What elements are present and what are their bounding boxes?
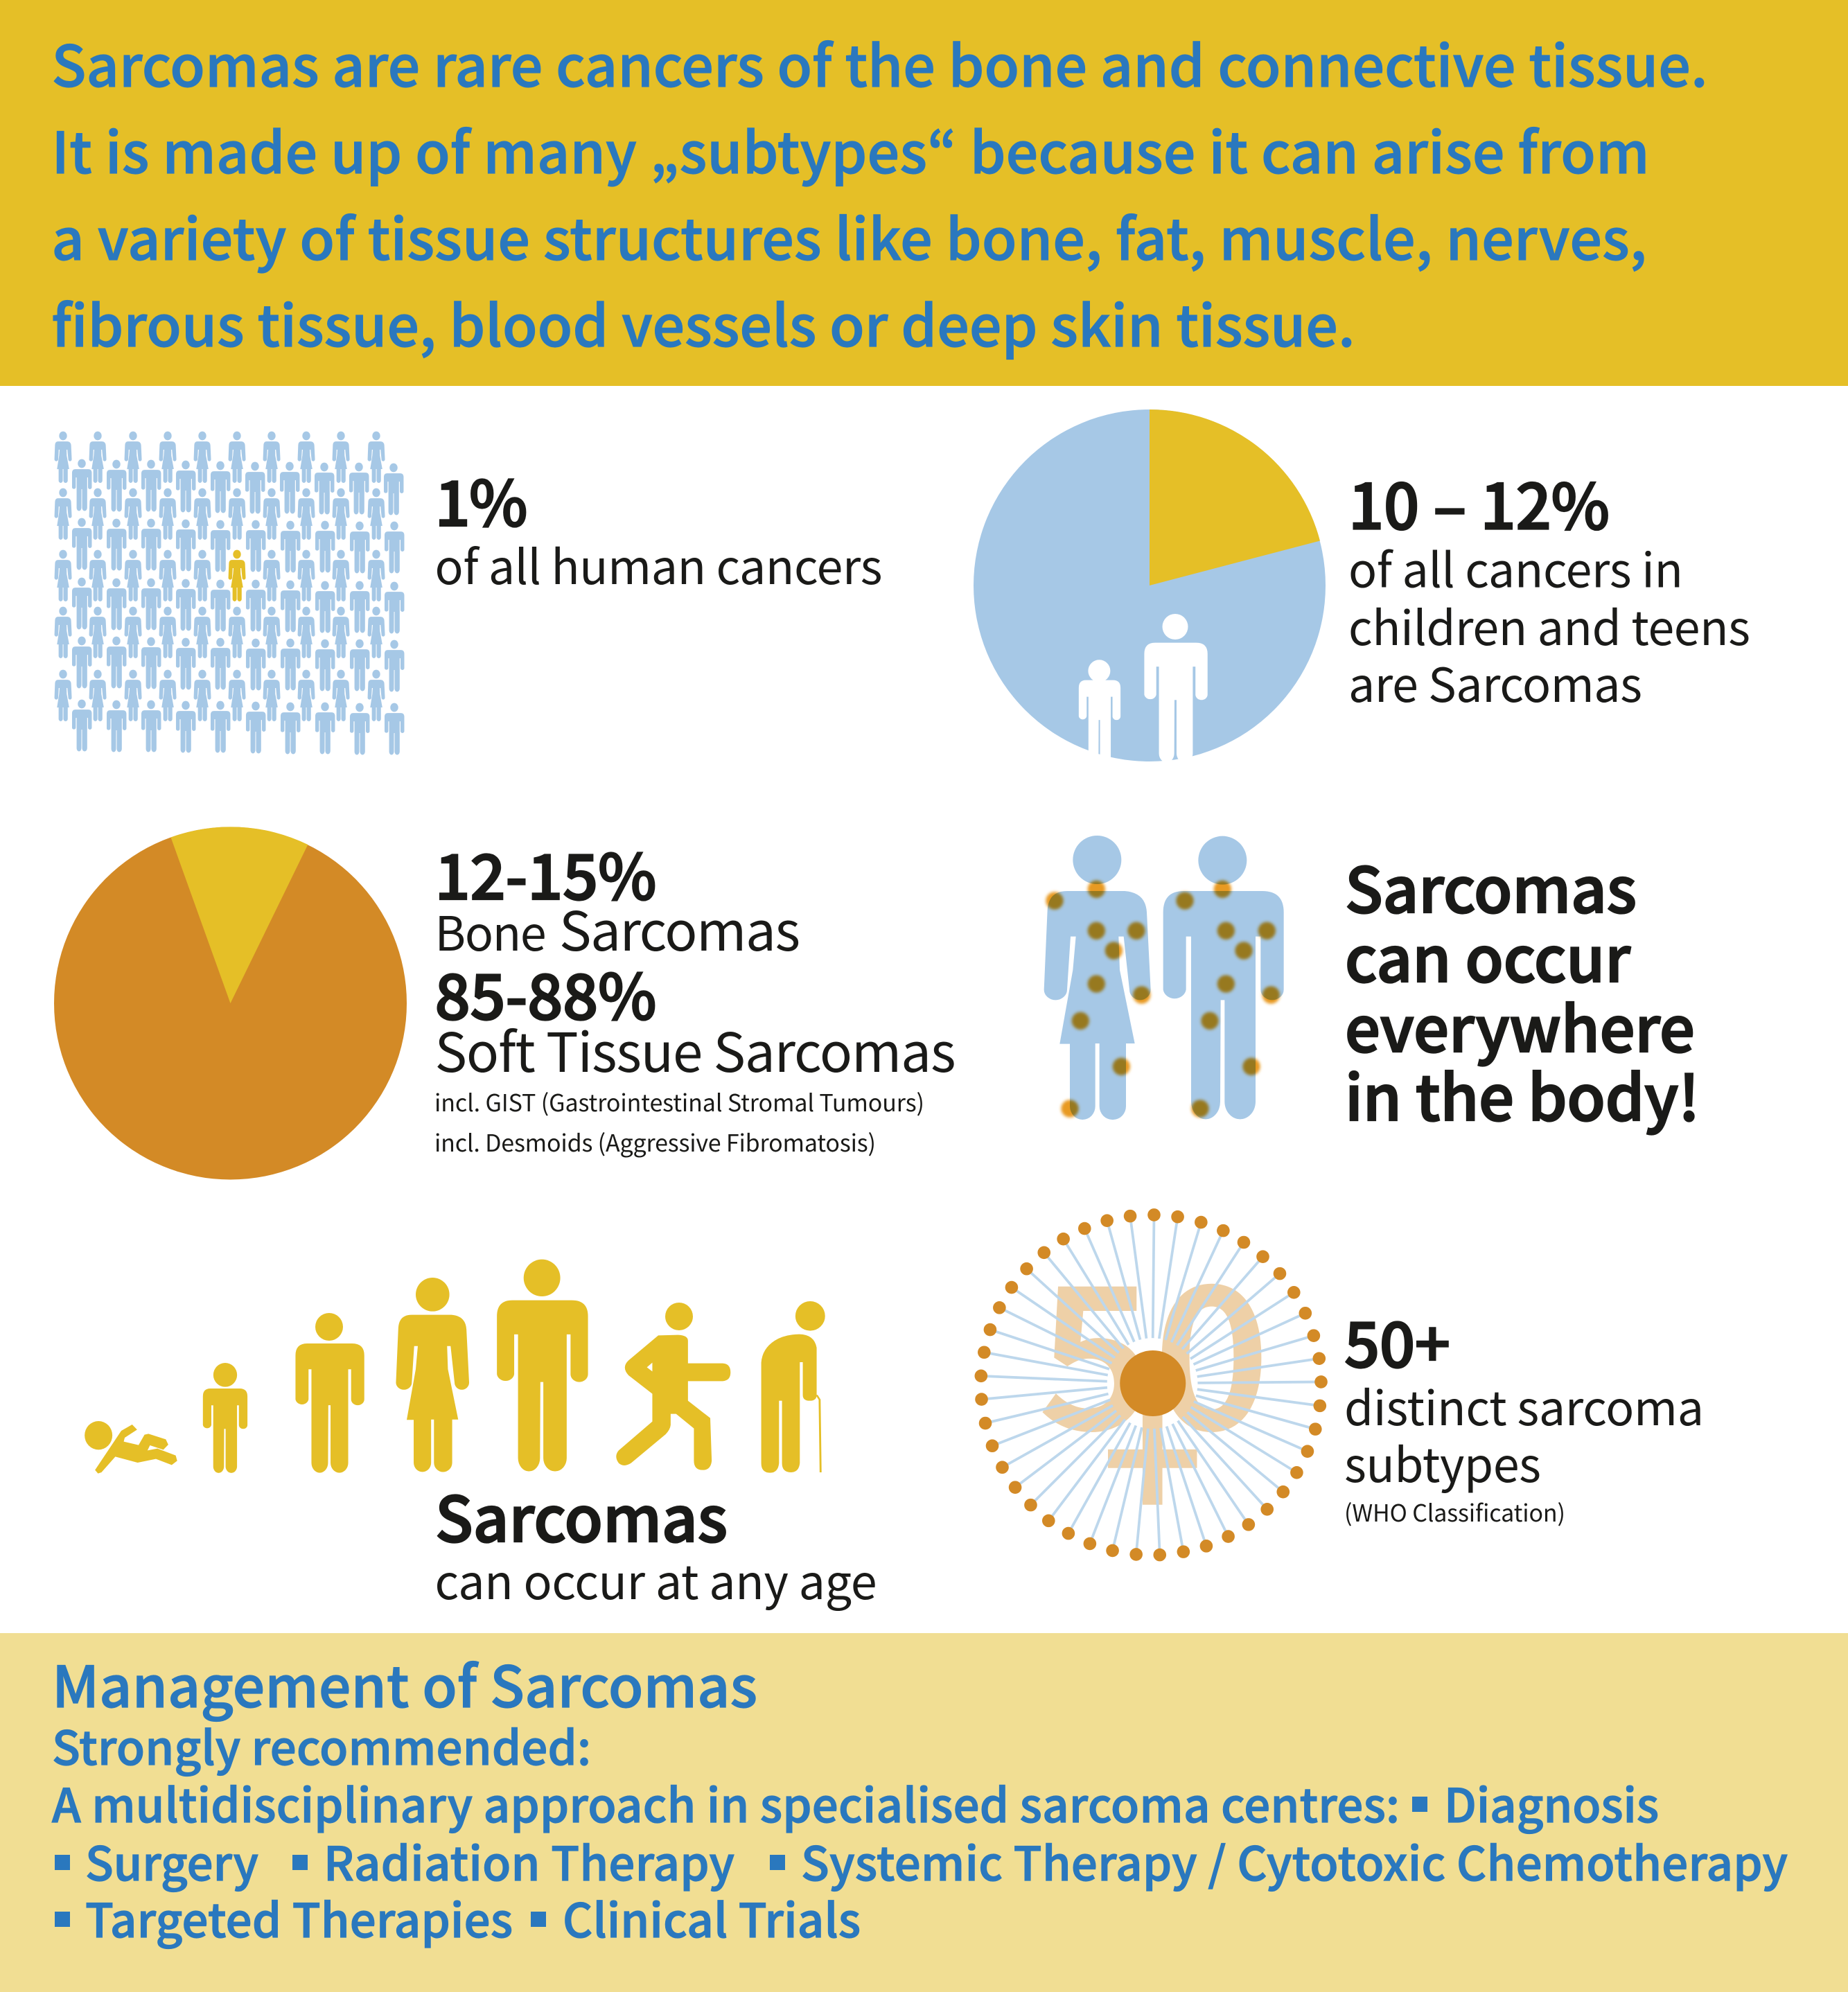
stat: 1%: [435, 454, 883, 598]
large 50: 50: [1037, 1200, 1270, 1487]
header text: [51, 21, 1707, 363]
stat: any age: Sarcomas: [435, 1470, 728, 1560]
stat: sarcoma types: incl. Desmoids (Aggressive Fibromatosis): [434, 1125, 876, 1158]
icon: baby: [85, 1421, 177, 1474]
icon: elderly person with cane: [762, 1301, 825, 1473]
stat: sarcoma types: Bone: [435, 896, 546, 964]
stat: 10-12%: of all cancers in: [1348, 532, 1683, 601]
callout: everywhere in the body: everywhere: [1345, 980, 1695, 1070]
management text: Surgery: [85, 1827, 258, 1894]
subtypes starburst: [981, 1200, 1321, 1555]
icon: teen: [295, 1313, 364, 1473]
stat: 50+ subtypes: distinct sarcoma: [1344, 1370, 1704, 1439]
header band: [0, 0, 1848, 386]
stat: 10-12%: 10 – 12%: [1348, 457, 1610, 547]
stat: 10-12%: children and teens: [1348, 590, 1750, 659]
stat: sarcoma types: 12-15%: [435, 827, 657, 917]
icon: runner: [616, 1303, 730, 1470]
management text: Diagnosis: [1444, 1769, 1659, 1836]
management text: Clinical Trials: [563, 1884, 861, 1951]
management heading: Management of Sarcomas: [52, 1641, 757, 1724]
spokes: [981, 1215, 1321, 1555]
cross of symbol: [1108, 1413, 1197, 1505]
pie chart: children and teens: [974, 409, 1326, 764]
body figures with tumour spots: [1044, 836, 1284, 1120]
header text: It is made up of many „subtypes“ because it can arise from: [51, 107, 1649, 190]
stat: sarcoma types: [434, 827, 956, 1158]
header text: a variety of tissue structures like bone, fat, muscle, nerves,: [51, 194, 1646, 276]
stat: 1%: 1%: [435, 454, 528, 544]
callout: everywhere in the body: in the body!: [1345, 1048, 1700, 1138]
management text: Systemic Therapy / Cytotoxic Chemotherapy: [801, 1827, 1788, 1894]
stat: sarcoma types: Soft Tissue Sarcomas: [435, 1010, 956, 1088]
icon: adult and child: [1079, 614, 1208, 764]
ring of dots: [981, 1215, 1321, 1555]
stat: 50+ subtypes: (WHO Classification): [1344, 1495, 1565, 1528]
highlighted person: [229, 550, 246, 601]
management text: Targeted Therapies: [85, 1884, 513, 1951]
icon: man: [497, 1260, 588, 1472]
icon: child: [203, 1363, 247, 1473]
callout: everywhere in the body: [1345, 840, 1700, 1138]
centre circle: [1120, 1350, 1186, 1416]
header text: fibrous tissue, blood vessels or deep skin tissue.: [51, 281, 1355, 363]
management text: [52, 1711, 1788, 1951]
stat: any age: can occur at any age: [435, 1544, 877, 1613]
callout: everywhere in the body: Sarcomas: [1345, 840, 1637, 931]
age figures: [85, 1260, 825, 1474]
people grid icon: one in a hundred: [55, 432, 404, 755]
callout: everywhere in the body: can occur: [1345, 910, 1630, 1000]
stat: sarcoma types: Sarcomas: [559, 889, 800, 967]
management text: Strongly recommended:: [52, 1711, 591, 1779]
stat: sarcoma types: 85-88%: [435, 947, 657, 1037]
stat: 10-12%: are Sarcomas: [1348, 647, 1642, 716]
management text: A multidisciplinary approach in specialised sarcoma centres:: [52, 1769, 1400, 1836]
stat: sarcoma types: incl. GIST (Gastrointestinal Stromal Tumours): [434, 1084, 924, 1118]
header text: Sarcomas are rare cancers of the bone and connective tissue.: [51, 21, 1707, 103]
icon: woman: [396, 1278, 469, 1472]
management panel: [0, 1633, 1848, 1992]
stat: 50+ subtypes: subtypes: [1344, 1427, 1541, 1496]
stat: 1%: of all human cancers: [435, 529, 883, 598]
stat: any age: [435, 1470, 877, 1613]
pie chart: bone vs soft tissue: [54, 827, 407, 1179]
stat: 10-12%: [1348, 457, 1750, 716]
stat: 50+ subtypes: [1344, 1295, 1704, 1528]
stat: 50+ subtypes: 50+: [1344, 1295, 1450, 1385]
bullets: [55, 1797, 1427, 1927]
management text: Radiation Therapy: [324, 1827, 734, 1894]
